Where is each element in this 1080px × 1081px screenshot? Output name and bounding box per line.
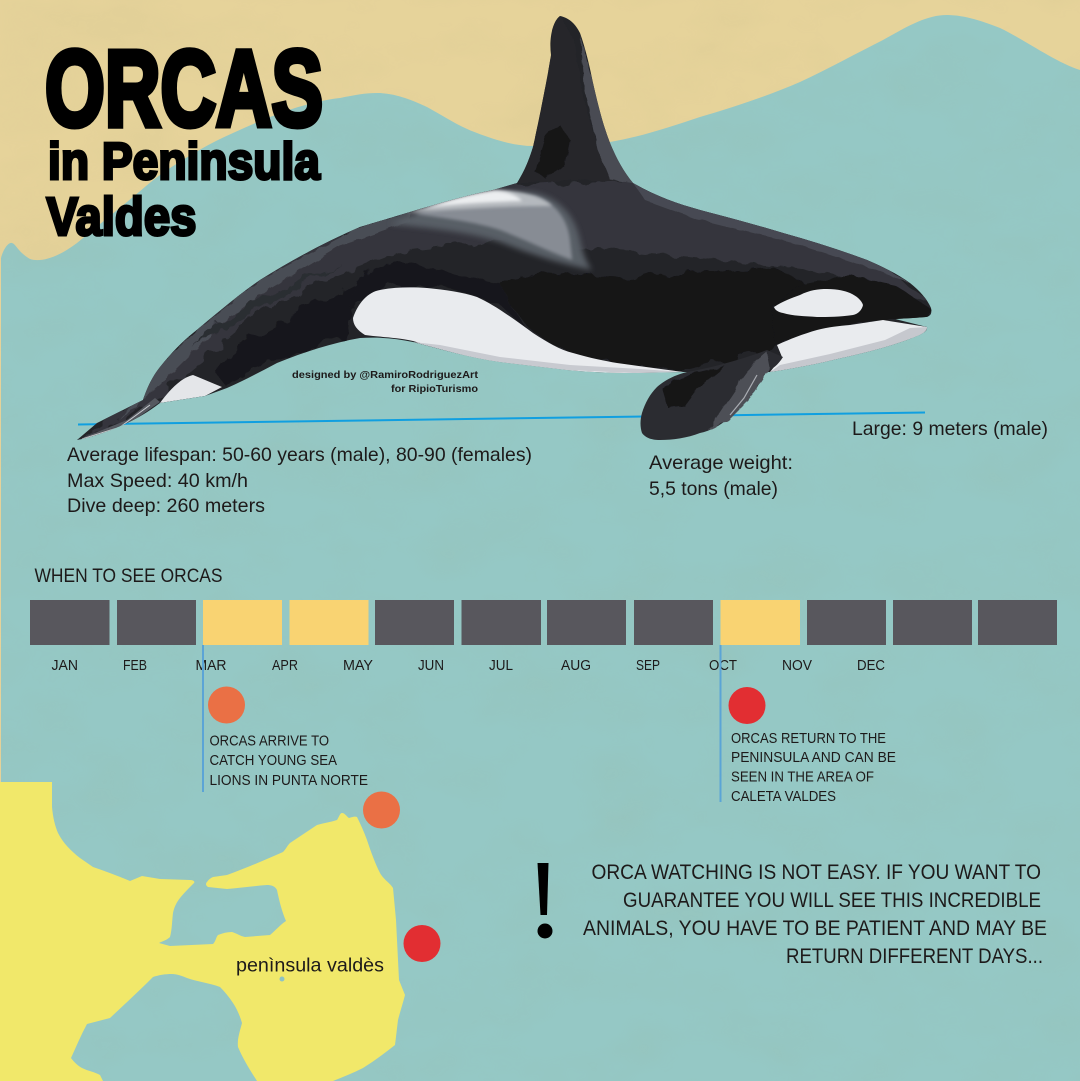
stat: weight: [649, 452, 793, 500]
icon: exclamation mark: [538, 863, 552, 938]
timeline heading: WHEN TO SEE ORCAS: [34, 565, 222, 587]
measure line: length: [78, 412, 925, 424]
map label: penìnsula valdès: [236, 954, 384, 976]
stats: lifespan, speed, dive: Average lifespan: 50-60 years (male), 80-90 (females): [67, 444, 532, 466]
mid-tail dark patches: [215, 286, 357, 386]
tail white patch: [160, 375, 222, 403]
credit: [292, 369, 479, 395]
pectoral fin edge tone: [708, 352, 770, 430]
orca illustration: [60, 0, 950, 450]
warning note: GUARANTEE YOU WILL SEE THIS INCREDIBLE: [623, 889, 1041, 912]
pectoral fin highlight: [730, 375, 757, 415]
warning note: RETURN DIFFERENT DAYS...: [786, 945, 1043, 968]
saddle highlight: [407, 190, 552, 213]
march caption: ORCAS ARRIVE TO: [210, 734, 329, 750]
eye patch: [774, 289, 863, 317]
credit: for RipioTurismo: [391, 383, 478, 395]
stats: lifespan, speed, dive: Dive deep: 260 meters: [67, 495, 265, 517]
warning note: ORCA WATCHING IS NOT EASY. IF YOU WANT TO: [592, 861, 1041, 884]
october caption: [731, 731, 896, 805]
march dot: [208, 686, 245, 724]
month labels: JUL: [489, 658, 513, 674]
stat: weight: 5,5 tons (male): [649, 478, 778, 500]
map: peninsula valdes: [0, 782, 405, 1081]
jaw shade: [770, 327, 927, 372]
pectoral fin dark patch: [662, 366, 725, 408]
orca body: [60, 0, 950, 450]
month labels: APR: [272, 658, 298, 674]
month labels: [52, 658, 885, 674]
dorsal fin shading: [517, 16, 622, 183]
stats: lifespan, speed, dive: Max Speed: 40 km/h: [67, 470, 248, 492]
month labels: FEB: [123, 658, 147, 674]
tail fluke streak: [80, 398, 160, 439]
back sheen: [70, 180, 935, 445]
month labels: JUN: [418, 658, 444, 674]
mid-body black core: [500, 268, 820, 372]
stat: weight: Average weight:: [649, 452, 793, 474]
head dark region: [772, 275, 932, 345]
map marker: Caleta Valdes: [404, 925, 440, 962]
month labels: AUG: [561, 658, 591, 674]
belly shade: [413, 342, 683, 373]
subtitle: in Peninsula: in Peninsula: [48, 133, 321, 191]
saddle patch outer: [390, 192, 592, 270]
flank white patch: [353, 287, 683, 374]
timeline bars: [30, 600, 1057, 645]
october caption: PENINSULA AND CAN BE: [731, 750, 896, 766]
month labels: DEC: [857, 658, 885, 674]
month labels: MAR: [196, 658, 226, 674]
back highlight: [120, 212, 410, 420]
month labels: OCT: [709, 658, 737, 674]
stat: length: Large: 9 meters (male): [852, 418, 1048, 440]
month labels: SEP: [636, 658, 660, 674]
october caption: ORCAS RETURN TO THE: [731, 731, 886, 747]
march caption: [210, 734, 368, 789]
october caption: CALETA VALDES: [731, 789, 836, 805]
subtitle: Valdes: Valdes: [46, 187, 196, 247]
october caption: SEEN IN THE AREA OF: [731, 770, 874, 786]
march caption: CATCH YOUNG SEA: [210, 753, 337, 769]
month labels: MAY: [343, 658, 373, 674]
title: [45, 28, 323, 247]
october dot: [728, 687, 766, 724]
title: ORCAS: [45, 28, 323, 148]
month labels: JAN: [52, 658, 78, 674]
october marker line: [720, 645, 722, 802]
warning note: [583, 861, 1047, 968]
march marker line: [202, 645, 204, 792]
jaw white patch: [770, 320, 927, 372]
map location dot: [280, 976, 284, 982]
warning note: ANIMALS, YOU HAVE TO BE PATIENT AND MAY BE: [583, 917, 1047, 940]
map marker: Punta Norte: [363, 792, 400, 828]
march caption: LIONS IN PUNTA NORTE: [210, 773, 368, 789]
pectoral fin: [640, 350, 783, 440]
month labels: NOV: [782, 658, 812, 674]
credit: designed by @RamiroRodriguezArt: [292, 369, 479, 381]
stats: lifespan, speed, dive: [67, 444, 532, 517]
saddle patch mid: [415, 195, 572, 260]
